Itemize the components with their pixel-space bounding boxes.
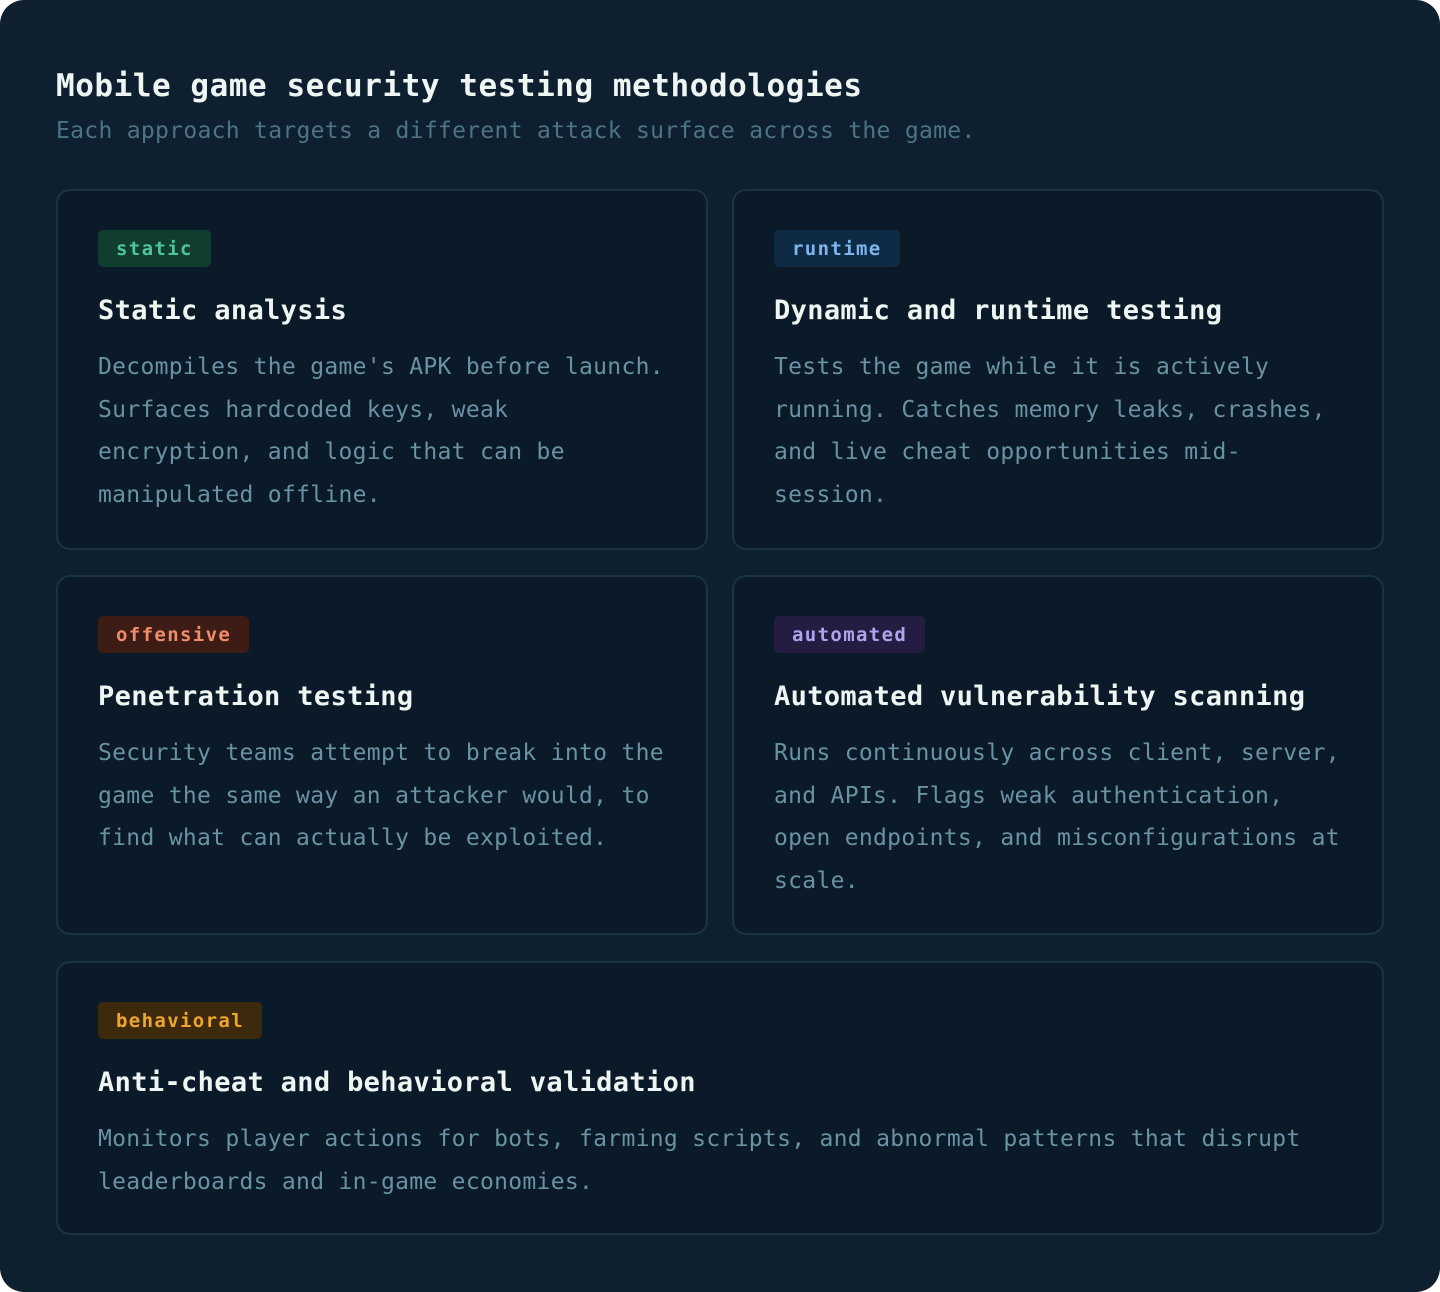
panel: static analysis [56,189,708,550]
text: anti-cheat [98,1126,1301,1195]
title: Mobile game security testing methodologies [56,68,863,104]
text: anti-cheat: Monitors player actions for bots, farming scripts, and abnormal patterns that disrupt [98,1126,1301,1152]
panel: runtime testing [732,189,1384,550]
heading: runtime: Dynamic and runtime testing [774,295,1222,326]
text: static analysis: encryption, and logic that can be [98,439,565,465]
badge: offensive: offensive [116,624,231,646]
badge: runtime: runtime [792,238,882,260]
panel: anti-cheat [56,961,1384,1235]
text: static analysis: manipulated offline. [98,482,381,508]
text: penetration: Security teams attempt to break into the [98,740,664,766]
subtitle: Each approach targets a different attack surface across the game. [56,118,976,144]
badge: automated: automated [792,624,907,646]
text: static analysis [98,354,664,508]
text: runtime: and live cheat opportunities mid- [774,439,1241,465]
panel: automated scanning [732,575,1384,935]
text: automated: and APIs. Flags weak authentication, [774,783,1283,809]
text: runtime: session. [774,482,887,508]
text: runtime [774,354,1326,508]
badge: behavioral: behavioral [116,1010,244,1032]
text: penetration: game the same way an attacker would, to [98,783,650,809]
text: automated [774,740,1340,894]
heading: anti-cheat: Anti-cheat and behavioral validation [98,1067,696,1098]
text: automated: Runs continuously across client, server, [774,740,1340,766]
text: runtime: Tests the game while it is actively [774,354,1269,380]
text: automated: open endpoints, and misconfigurations at [774,825,1340,851]
heading: static analysis: Static analysis [98,295,347,326]
badge: static [98,230,211,267]
badge: behavioral [98,1002,262,1039]
text: automated: scale. [774,868,859,894]
text: runtime: running. Catches memory leaks, crashes, [774,397,1326,423]
badge: offensive [98,616,249,653]
heading: penetration: Penetration testing [98,681,414,712]
text: static analysis: Decompiles the game's APK before launch. [98,354,664,380]
text: anti-cheat: leaderboards and in-game economies. [98,1169,593,1195]
text: static analysis: Surfaces hardcoded keys, weak [98,397,508,423]
badge: automated [774,616,925,653]
heading: automated: Automated vulnerability scanning [774,681,1305,712]
text: penetration [98,740,664,851]
badge: static: static [116,238,193,260]
badge: runtime [774,230,900,267]
panel: penetration testing [56,575,708,935]
text: penetration: find what can actually be exploited. [98,825,607,851]
